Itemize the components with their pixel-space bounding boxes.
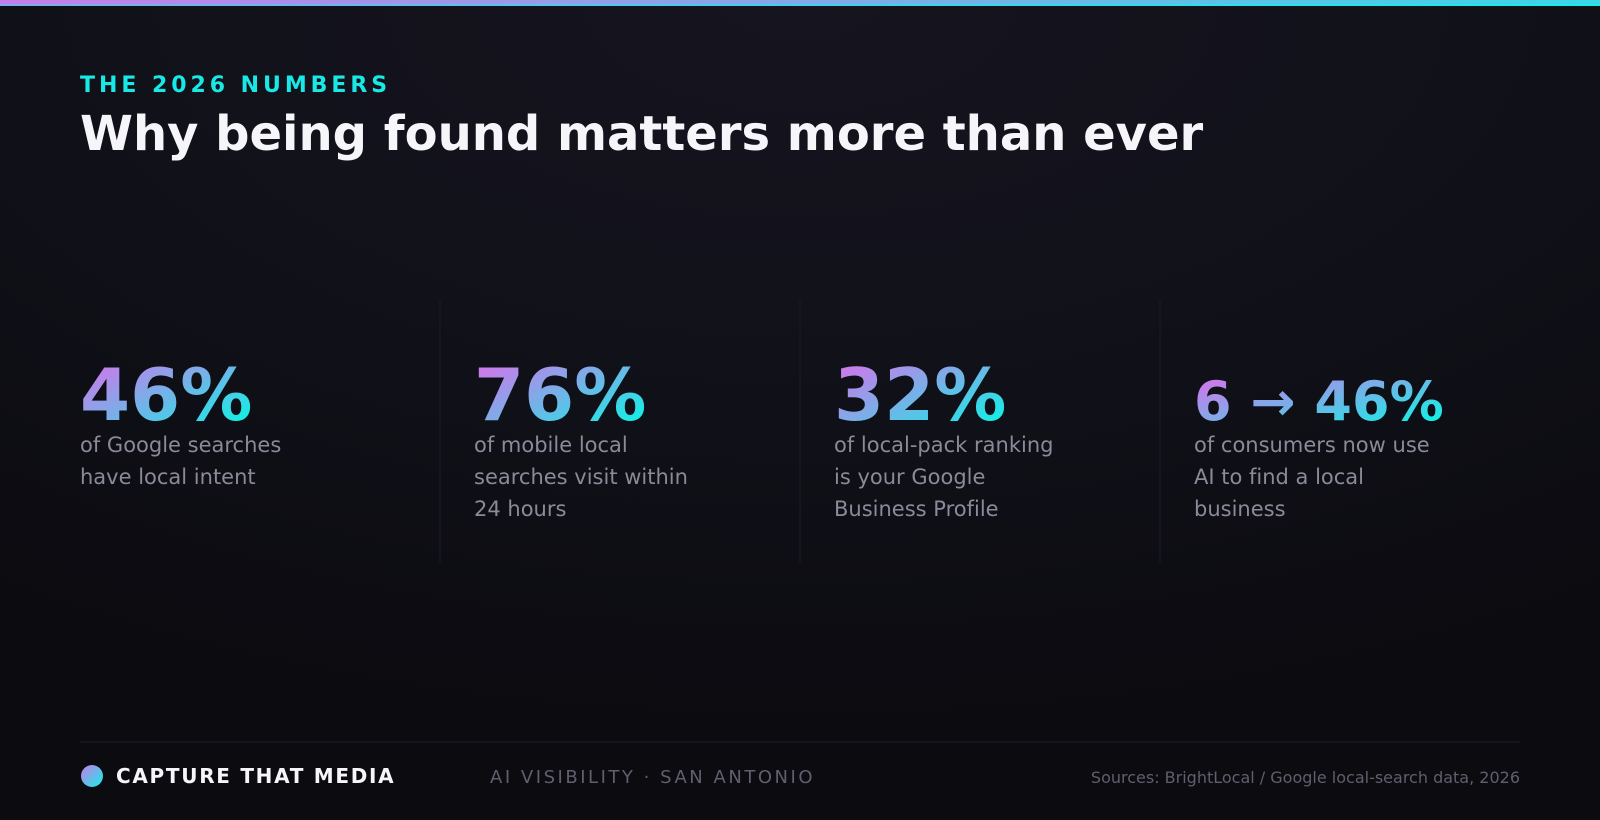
stat number: 46% <box>80 353 252 437</box>
stat number: 76% <box>474 353 646 437</box>
stat description: of local-pack ranking <box>834 433 1053 457</box>
stat: 32% of local-pack ranking <box>834 353 1053 521</box>
stat description: searches visit within <box>474 465 688 489</box>
eyebrow heading: THE 2026 NUMBERS <box>80 73 391 98</box>
stat description: of Google searches <box>80 433 281 457</box>
stat number: 32% <box>834 353 1006 437</box>
icon: brand dot <box>81 765 103 787</box>
tagline: AI VISIBILITY · SAN ANTONIO <box>490 767 815 788</box>
stat description: business <box>1194 497 1286 521</box>
stat: 46% of Google searches <box>80 353 281 489</box>
stat description: of consumers now use <box>1194 433 1430 457</box>
stat: 6 to 46% of consumers use AI <box>1194 370 1444 521</box>
title: Why being found matters more than ever <box>80 106 1204 162</box>
stat description: have local intent <box>80 465 256 489</box>
stat description: AI to find a local <box>1194 465 1364 489</box>
brand name: CAPTURE THAT MEDIA <box>116 764 395 788</box>
stat number: 6 → 46% <box>1194 370 1444 433</box>
stat description: is your Google <box>834 465 985 489</box>
stat description: of mobile local <box>474 433 628 457</box>
sources: Sources: BrightLocal / Google local-search data, 2026 <box>1091 768 1520 787</box>
stat description: Business Profile <box>834 497 999 521</box>
top gradient bar <box>0 0 1600 6</box>
stat: 76% of mobile local searches <box>474 353 688 521</box>
stat description: 24 hours <box>474 497 566 521</box>
